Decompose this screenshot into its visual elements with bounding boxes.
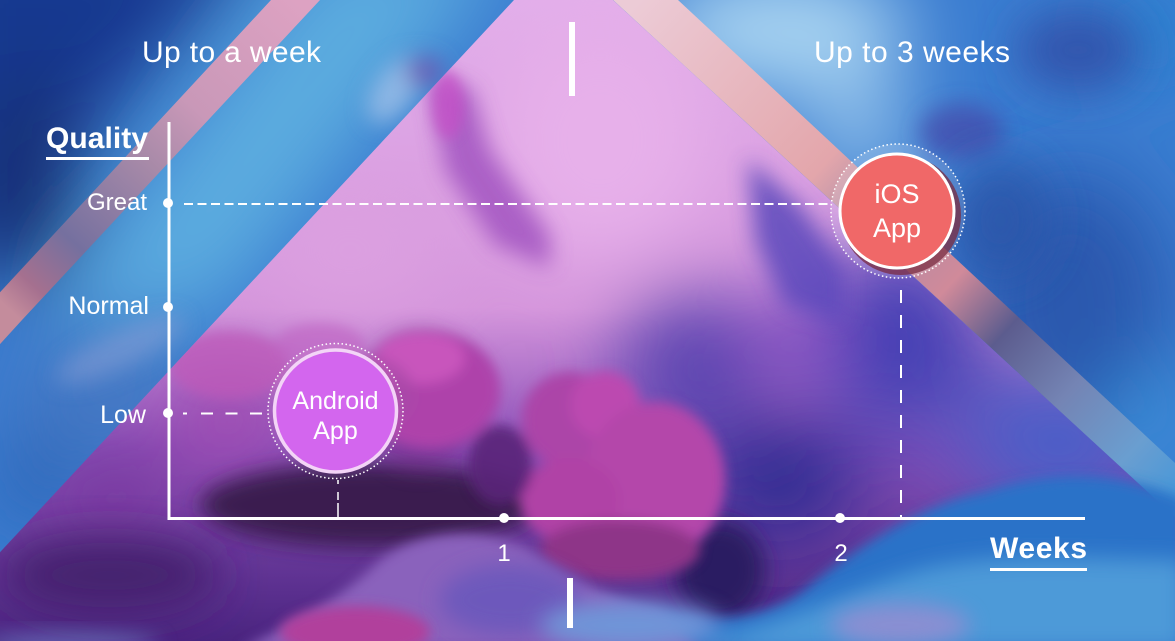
- heading: up to a week: Up to a week: [142, 36, 322, 69]
- blue wave lower right: [590, 476, 1175, 641]
- x axis title: Weeks: Weeks: [990, 532, 1087, 565]
- x label: 2: 2: [834, 540, 848, 567]
- dashed guide lines: [183, 204, 901, 518]
- heading: up to 3 weeks: Up to 3 weeks: [814, 36, 1010, 69]
- dark low band: [200, 463, 540, 547]
- background: bottom smoke: [0, 476, 1175, 641]
- background: dark blue smoke blobs upper right: [920, 8, 1140, 280]
- pink clouds: [170, 323, 725, 580]
- divider: bottom tick: [567, 578, 573, 628]
- bubble: iOS App: iOS: [874, 179, 920, 209]
- bubble: Android App: [268, 344, 403, 478]
- bubble: iOS App: App: [873, 213, 921, 243]
- y axis title: Quality: Quality: [46, 122, 148, 155]
- lavender cloud lower centre: [240, 534, 700, 641]
- divider: top tick: [569, 22, 575, 96]
- background: right diagonal band: [613, 0, 1175, 517]
- background: left diagonal band: [0, 0, 320, 355]
- bubble: iOS App: [831, 144, 965, 278]
- bubble: Android App: App: [313, 417, 358, 445]
- y label: Normal: Normal: [68, 292, 149, 320]
- chart: quality vs weeks: [46, 122, 1087, 571]
- background: wisp near triangle edge: [49, 47, 445, 396]
- dark streaks: [428, 74, 550, 268]
- y axis and x axis: [169, 122, 1085, 518]
- y label: Great: Great: [87, 189, 147, 216]
- x label: 1: 1: [497, 540, 511, 567]
- y label: Low: Low: [100, 401, 147, 429]
- axis point markers: [163, 198, 845, 523]
- bubble: Android App: Android: [292, 387, 379, 415]
